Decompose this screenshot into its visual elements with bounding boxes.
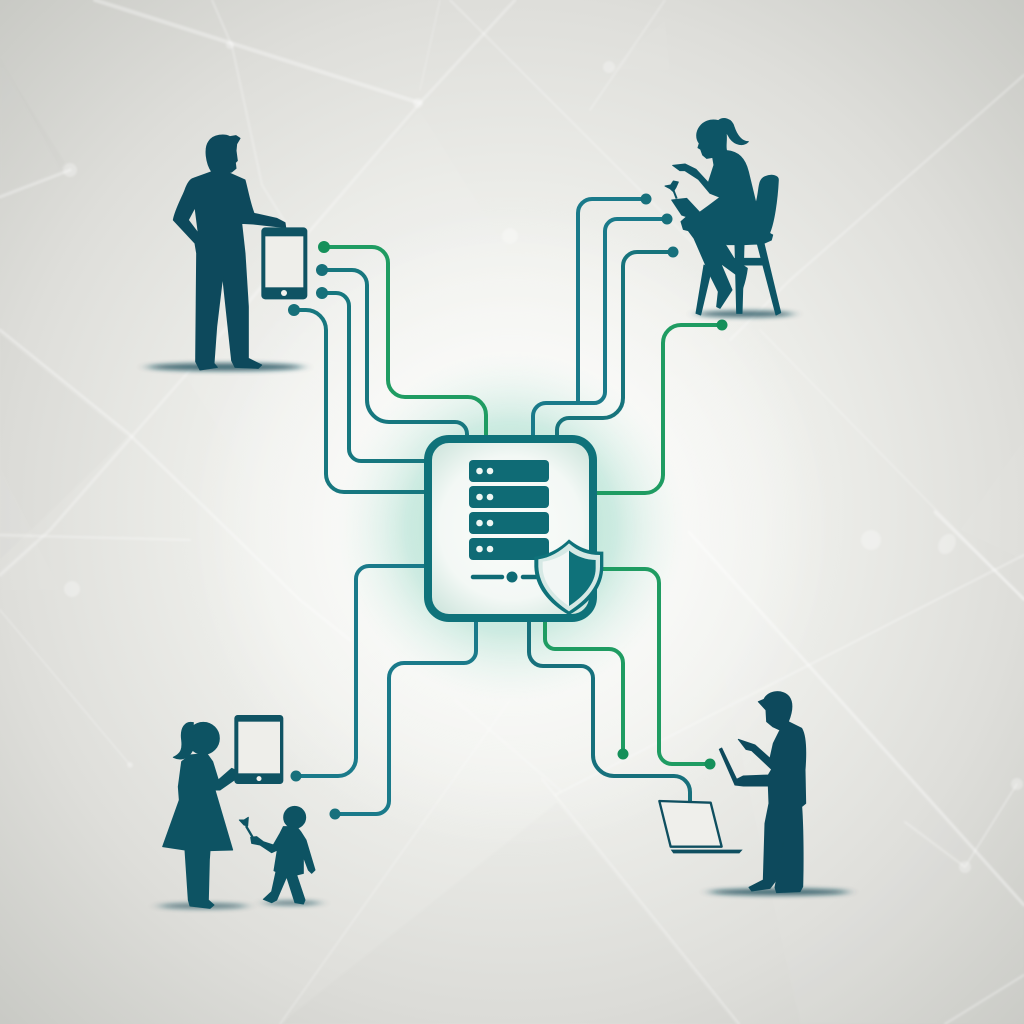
teal line 1 top right <box>578 194 652 403</box>
connectors: son to server <box>529 569 716 802</box>
panel frame <box>428 439 593 618</box>
figure: mother on chair <box>665 119 793 318</box>
ground shadow <box>147 363 303 371</box>
shield icon <box>534 539 603 615</box>
ground shadow <box>697 310 793 318</box>
green line top left <box>318 241 486 436</box>
teal line to child <box>330 620 476 820</box>
connectors: children to server <box>290 566 476 820</box>
teal line 3 top right <box>557 246 678 436</box>
father silhouette <box>173 135 286 370</box>
mother and chair silhouette <box>665 119 781 315</box>
figure: son with laptop and phone <box>659 692 849 896</box>
figure: mother with tablet and child <box>159 715 320 909</box>
ground shadows <box>159 900 320 909</box>
tablet held by girl <box>234 715 283 784</box>
connectors: mother to server <box>533 194 728 493</box>
teal line 2 top right <box>533 214 672 436</box>
child silhouette with flower <box>239 806 315 904</box>
teal line 2 top left <box>316 264 467 437</box>
green line right <box>596 320 728 493</box>
glow behind central server <box>180 200 840 860</box>
ground shadow <box>709 888 849 896</box>
laptop <box>659 801 743 853</box>
teal line to laptop <box>529 620 690 802</box>
figure: father with tablet <box>147 135 307 371</box>
teal line 3 top left <box>316 287 426 461</box>
server rack icon <box>469 460 549 582</box>
green line short <box>545 620 628 760</box>
connectors: father to server <box>288 241 486 492</box>
teal line 4 top left <box>288 304 426 492</box>
central server panel <box>428 439 603 618</box>
teal line to tablet <box>290 566 426 782</box>
green line to laptop user <box>603 569 716 770</box>
tablet held by father <box>261 227 307 299</box>
girl silhouette <box>163 722 235 908</box>
son silhouette <box>719 692 806 893</box>
